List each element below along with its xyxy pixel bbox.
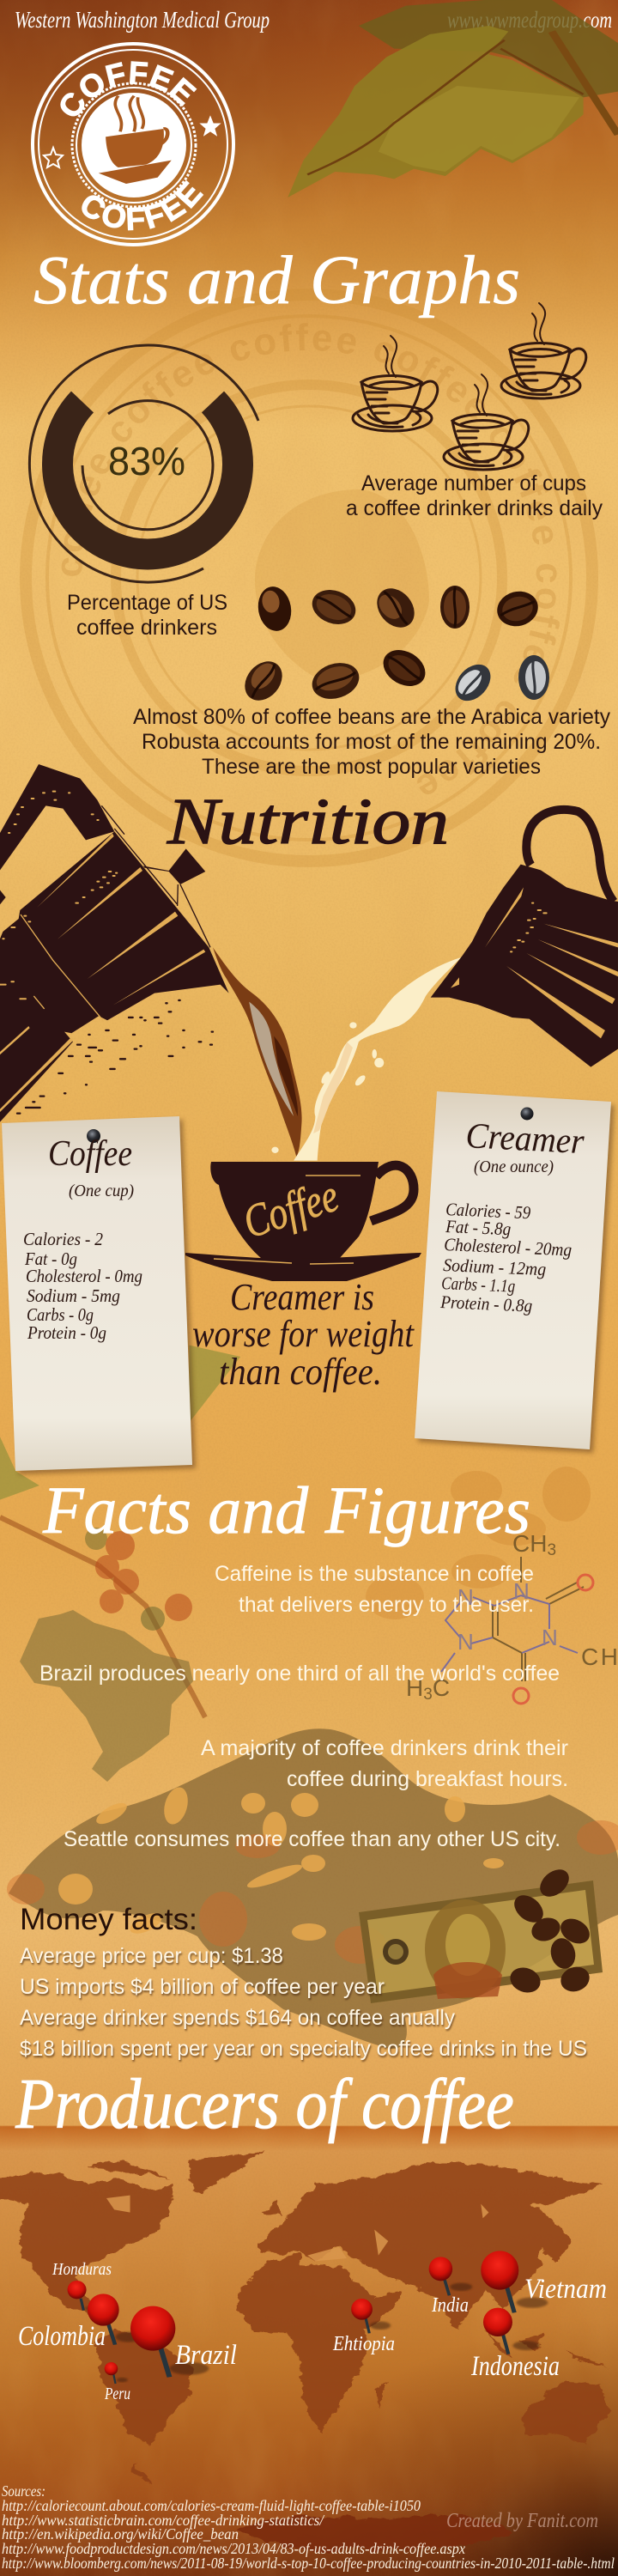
label: indonesia: Indonesia xyxy=(470,2351,560,2382)
fact: breakfast: coffee during breakfast hours. xyxy=(287,1767,568,1791)
card values: Cholesterol - 20mg xyxy=(444,1234,573,1260)
card values xyxy=(439,1199,573,1316)
sources: http://www.statisticbrain.com/coffee-drinking-statistics/ xyxy=(2,2512,325,2529)
brazil map silhouette xyxy=(20,1610,193,1782)
methyl groups: CH xyxy=(512,1530,547,1557)
bean 1 xyxy=(255,584,294,634)
title: producers of coffee: Producers of coffee xyxy=(15,2064,514,2144)
card values: Protein - 0.8g xyxy=(439,1291,533,1316)
pin xyxy=(87,1129,100,1143)
methyl groups: 3 xyxy=(423,1686,433,1704)
fact: caffeine xyxy=(215,1562,534,1617)
pin: vietnam xyxy=(481,2251,548,2312)
fact: breakfast xyxy=(201,1736,568,1791)
bean 5 xyxy=(494,586,542,631)
donut caption: coffee drinkers xyxy=(76,616,217,640)
donut caption: Percentage of US xyxy=(67,591,227,615)
logo bottom word: COFFEE xyxy=(82,180,204,230)
pin: brazil xyxy=(130,2306,209,2377)
label: honduras: Honduras xyxy=(52,2260,112,2279)
atoms xyxy=(457,1578,558,1655)
logo: coffee stamp xyxy=(31,42,235,246)
lighter map seas xyxy=(106,2196,488,2261)
callout: creamer is worse: than coffee. xyxy=(219,1351,382,1393)
label: peru: Peru xyxy=(104,2385,130,2403)
faded beans top right xyxy=(366,1467,591,1619)
background leaf behind text xyxy=(0,1346,240,1500)
header: group name: Western Washington Medical Group xyxy=(15,7,270,33)
money facts list: Average drinker spends $164 on coffee anually xyxy=(20,2006,455,2030)
label: ethiopia: Ehtiopia xyxy=(332,2333,395,2355)
pin: colombia xyxy=(88,2293,141,2345)
donut chart: 83 percent xyxy=(29,345,258,582)
fact: seattle: Seattle consumes more coffee than any other US city. xyxy=(64,1827,560,1851)
beans caption xyxy=(133,705,610,779)
spilled beans silhouette xyxy=(7,1728,618,2049)
atoms: N xyxy=(457,1584,474,1610)
title: facts and figures: Facts and Figures xyxy=(42,1473,530,1547)
cups caption: a coffee drinker drinks daily xyxy=(346,496,603,520)
methyl groups: C xyxy=(433,1674,450,1701)
sources: http://en.wikipedia.org/wiki/Coffee_bean xyxy=(2,2525,239,2543)
bean 3 xyxy=(369,581,422,635)
card subheading: (One cup) xyxy=(69,1182,134,1200)
card values: Sodium - 5mg xyxy=(27,1285,120,1306)
card values: Calories - 59 xyxy=(445,1199,531,1223)
card values: Fat - 5.8g xyxy=(445,1216,512,1239)
card values xyxy=(23,1229,142,1343)
pin: peru xyxy=(105,2362,128,2384)
fact: brazil: Brazil produces nearly one third of all the world's coffee xyxy=(39,1662,560,1686)
coffee grounds xyxy=(17,1000,213,1114)
fact: breakfast: A majority of coffee drinkers drink their xyxy=(201,1736,568,1760)
label: brazil: Brazil xyxy=(175,2340,237,2371)
logo top word: COFFEE xyxy=(60,61,197,117)
cups caption xyxy=(346,471,603,520)
caffeine molecule xyxy=(406,1530,618,1704)
callout: creamer is worse: Creamer is xyxy=(230,1276,374,1318)
pin xyxy=(520,1108,534,1120)
panel: creamer nutrition card xyxy=(415,1091,615,1453)
donut caption xyxy=(67,591,227,640)
card values: Calories - 2 xyxy=(23,1229,103,1249)
sources: http://caloriecount.about.com/calories-cream-fluid-light-coffee-table-i1050 xyxy=(2,2497,421,2514)
icon: hundred dollar bill with beans xyxy=(359,1864,603,2003)
pin: honduras xyxy=(68,2281,100,2311)
illustration: moka pot xyxy=(0,764,229,1122)
creamer stream xyxy=(271,957,461,1161)
callout: creamer is worse xyxy=(192,1276,415,1393)
fact: caffeine: Caffeine is the substance in coffee xyxy=(215,1562,534,1586)
coffee stream xyxy=(213,947,302,1157)
money facts list xyxy=(20,1944,587,2061)
beans caption: Almost 80% of coffee beans are the Arabica variety xyxy=(133,705,610,729)
facts text block xyxy=(39,1562,568,1851)
atoms: N xyxy=(457,1629,474,1655)
label: vietnam: Vietnam xyxy=(524,2274,607,2305)
oxygen atoms xyxy=(513,1575,593,1704)
logo cup xyxy=(99,96,172,184)
methyl groups xyxy=(406,1530,618,1704)
illustration: coffee cup xyxy=(185,1162,421,1281)
icon: three coffee cups xyxy=(353,303,586,470)
donut value: 83% xyxy=(108,439,185,483)
pin: indonesia xyxy=(483,2308,540,2354)
illustration: creamer jug xyxy=(431,810,618,1067)
callout: creamer is worse: worse for weight xyxy=(192,1313,415,1355)
moka speckles xyxy=(0,792,117,999)
label: india: India xyxy=(431,2294,469,2317)
sources xyxy=(2,2482,615,2572)
bean 2 xyxy=(307,584,360,630)
card values: Carbs - 0g xyxy=(27,1304,94,1325)
beans caption: Robusta accounts for most of the remaining 20%. xyxy=(142,730,601,754)
money facts list: Average price per cup: $1.38 xyxy=(20,1944,283,1968)
money facts list: US imports $4 billion of coffee per year xyxy=(20,1975,385,1999)
methyl groups: 3 xyxy=(547,1541,556,1559)
money facts heading: Money facts: xyxy=(20,1903,197,1936)
cups caption: Average number of cups xyxy=(361,471,586,495)
money facts list: $18 billion spent per year on specialty coffee drinks in the US xyxy=(20,2037,587,2061)
card heading: Coffee xyxy=(48,1134,132,1174)
coffee bean varieties xyxy=(237,581,549,708)
card values: Fat - 0g xyxy=(24,1249,77,1269)
panel: coffee nutrition card xyxy=(2,1116,196,1474)
card values: Sodium - 12mg xyxy=(443,1255,547,1279)
card values: Protein - 0g xyxy=(27,1322,106,1343)
atoms: N xyxy=(542,1625,558,1650)
logo stars xyxy=(198,114,222,137)
jug speckles xyxy=(511,903,547,951)
coffee leaves xyxy=(288,0,618,197)
card subheading: (One ounce) xyxy=(474,1157,554,1176)
bean 4 xyxy=(440,586,470,629)
map labels xyxy=(18,2260,607,2403)
bean 8 xyxy=(377,643,432,693)
bean 10 xyxy=(518,655,549,700)
methyl groups: CH xyxy=(581,1643,618,1670)
world map xyxy=(0,2151,611,2551)
cup label: Coffee xyxy=(237,1170,344,1248)
label: colombia: Colombia xyxy=(18,2321,106,2352)
map pins xyxy=(68,2251,548,2384)
bean 9 xyxy=(448,658,498,708)
coffee branch with berries xyxy=(0,1517,205,1717)
fact: caffeine: that delivers energy to the user. xyxy=(239,1593,534,1617)
bean 6 xyxy=(237,654,290,708)
atoms: N xyxy=(513,1578,530,1604)
card values: Carbs - 1.1g xyxy=(441,1273,516,1297)
card values: Cholesterol - 0mg xyxy=(26,1266,142,1286)
pin: ethiopia xyxy=(351,2299,391,2333)
beans caption: These are the most popular varieties xyxy=(202,755,541,779)
sources: http://www.foodproductdesign.com/news/2013/04/83-of-us-adults-drink-coffee.aspx xyxy=(2,2540,465,2557)
title: stats and graphs: Stats and Graphs xyxy=(33,243,520,319)
card heading: Creamer xyxy=(464,1116,585,1162)
title: nutrition: Nutrition xyxy=(167,786,449,858)
methyl groups: H xyxy=(406,1674,423,1701)
sources: Sources: xyxy=(2,2482,45,2500)
watermark stamp: coffee coffee coffee coffee coffee coffee coffee xyxy=(62,323,560,794)
bean 7 xyxy=(307,657,364,705)
pin: india xyxy=(429,2257,472,2295)
